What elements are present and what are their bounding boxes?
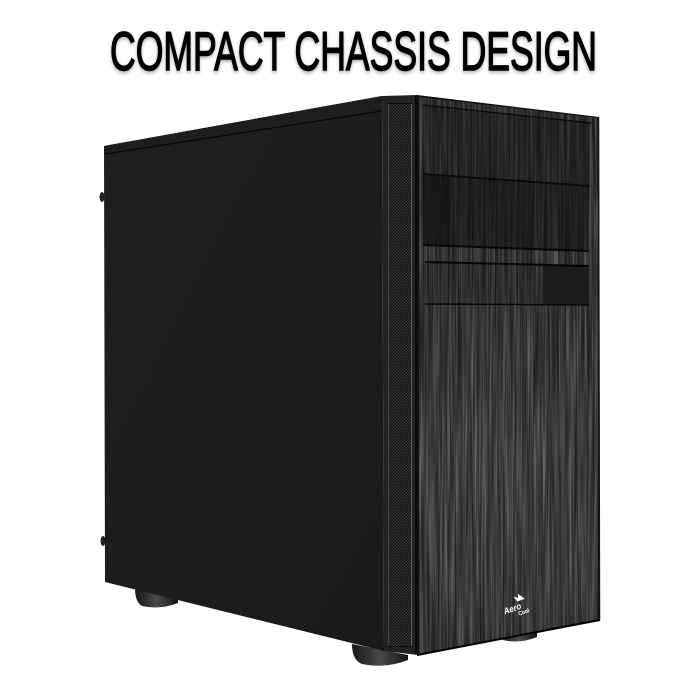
right edge	[598, 117, 600, 620]
infographic canvas	[100, 30, 600, 666]
side panel	[104, 96, 384, 651]
middle bay	[423, 175, 589, 251]
front foot	[352, 644, 408, 666]
top edge lip	[104, 96, 382, 154]
mesh strip	[382, 95, 418, 655]
logo: Cool	[518, 608, 531, 618]
computer case	[100, 95, 600, 666]
dark left portion	[423, 175, 450, 246]
rear foot left	[135, 588, 178, 607]
logo	[499, 592, 531, 622]
logo: Aero	[501, 601, 523, 617]
top bay	[423, 105, 591, 186]
bottom edge	[417, 620, 600, 655]
rear side bump bottom	[100, 536, 106, 546]
rear foot right	[500, 630, 537, 641]
dark panel	[543, 265, 589, 305]
front panel	[417, 95, 600, 656]
lower bay	[425, 262, 589, 305]
rear side bump top	[100, 192, 104, 202]
